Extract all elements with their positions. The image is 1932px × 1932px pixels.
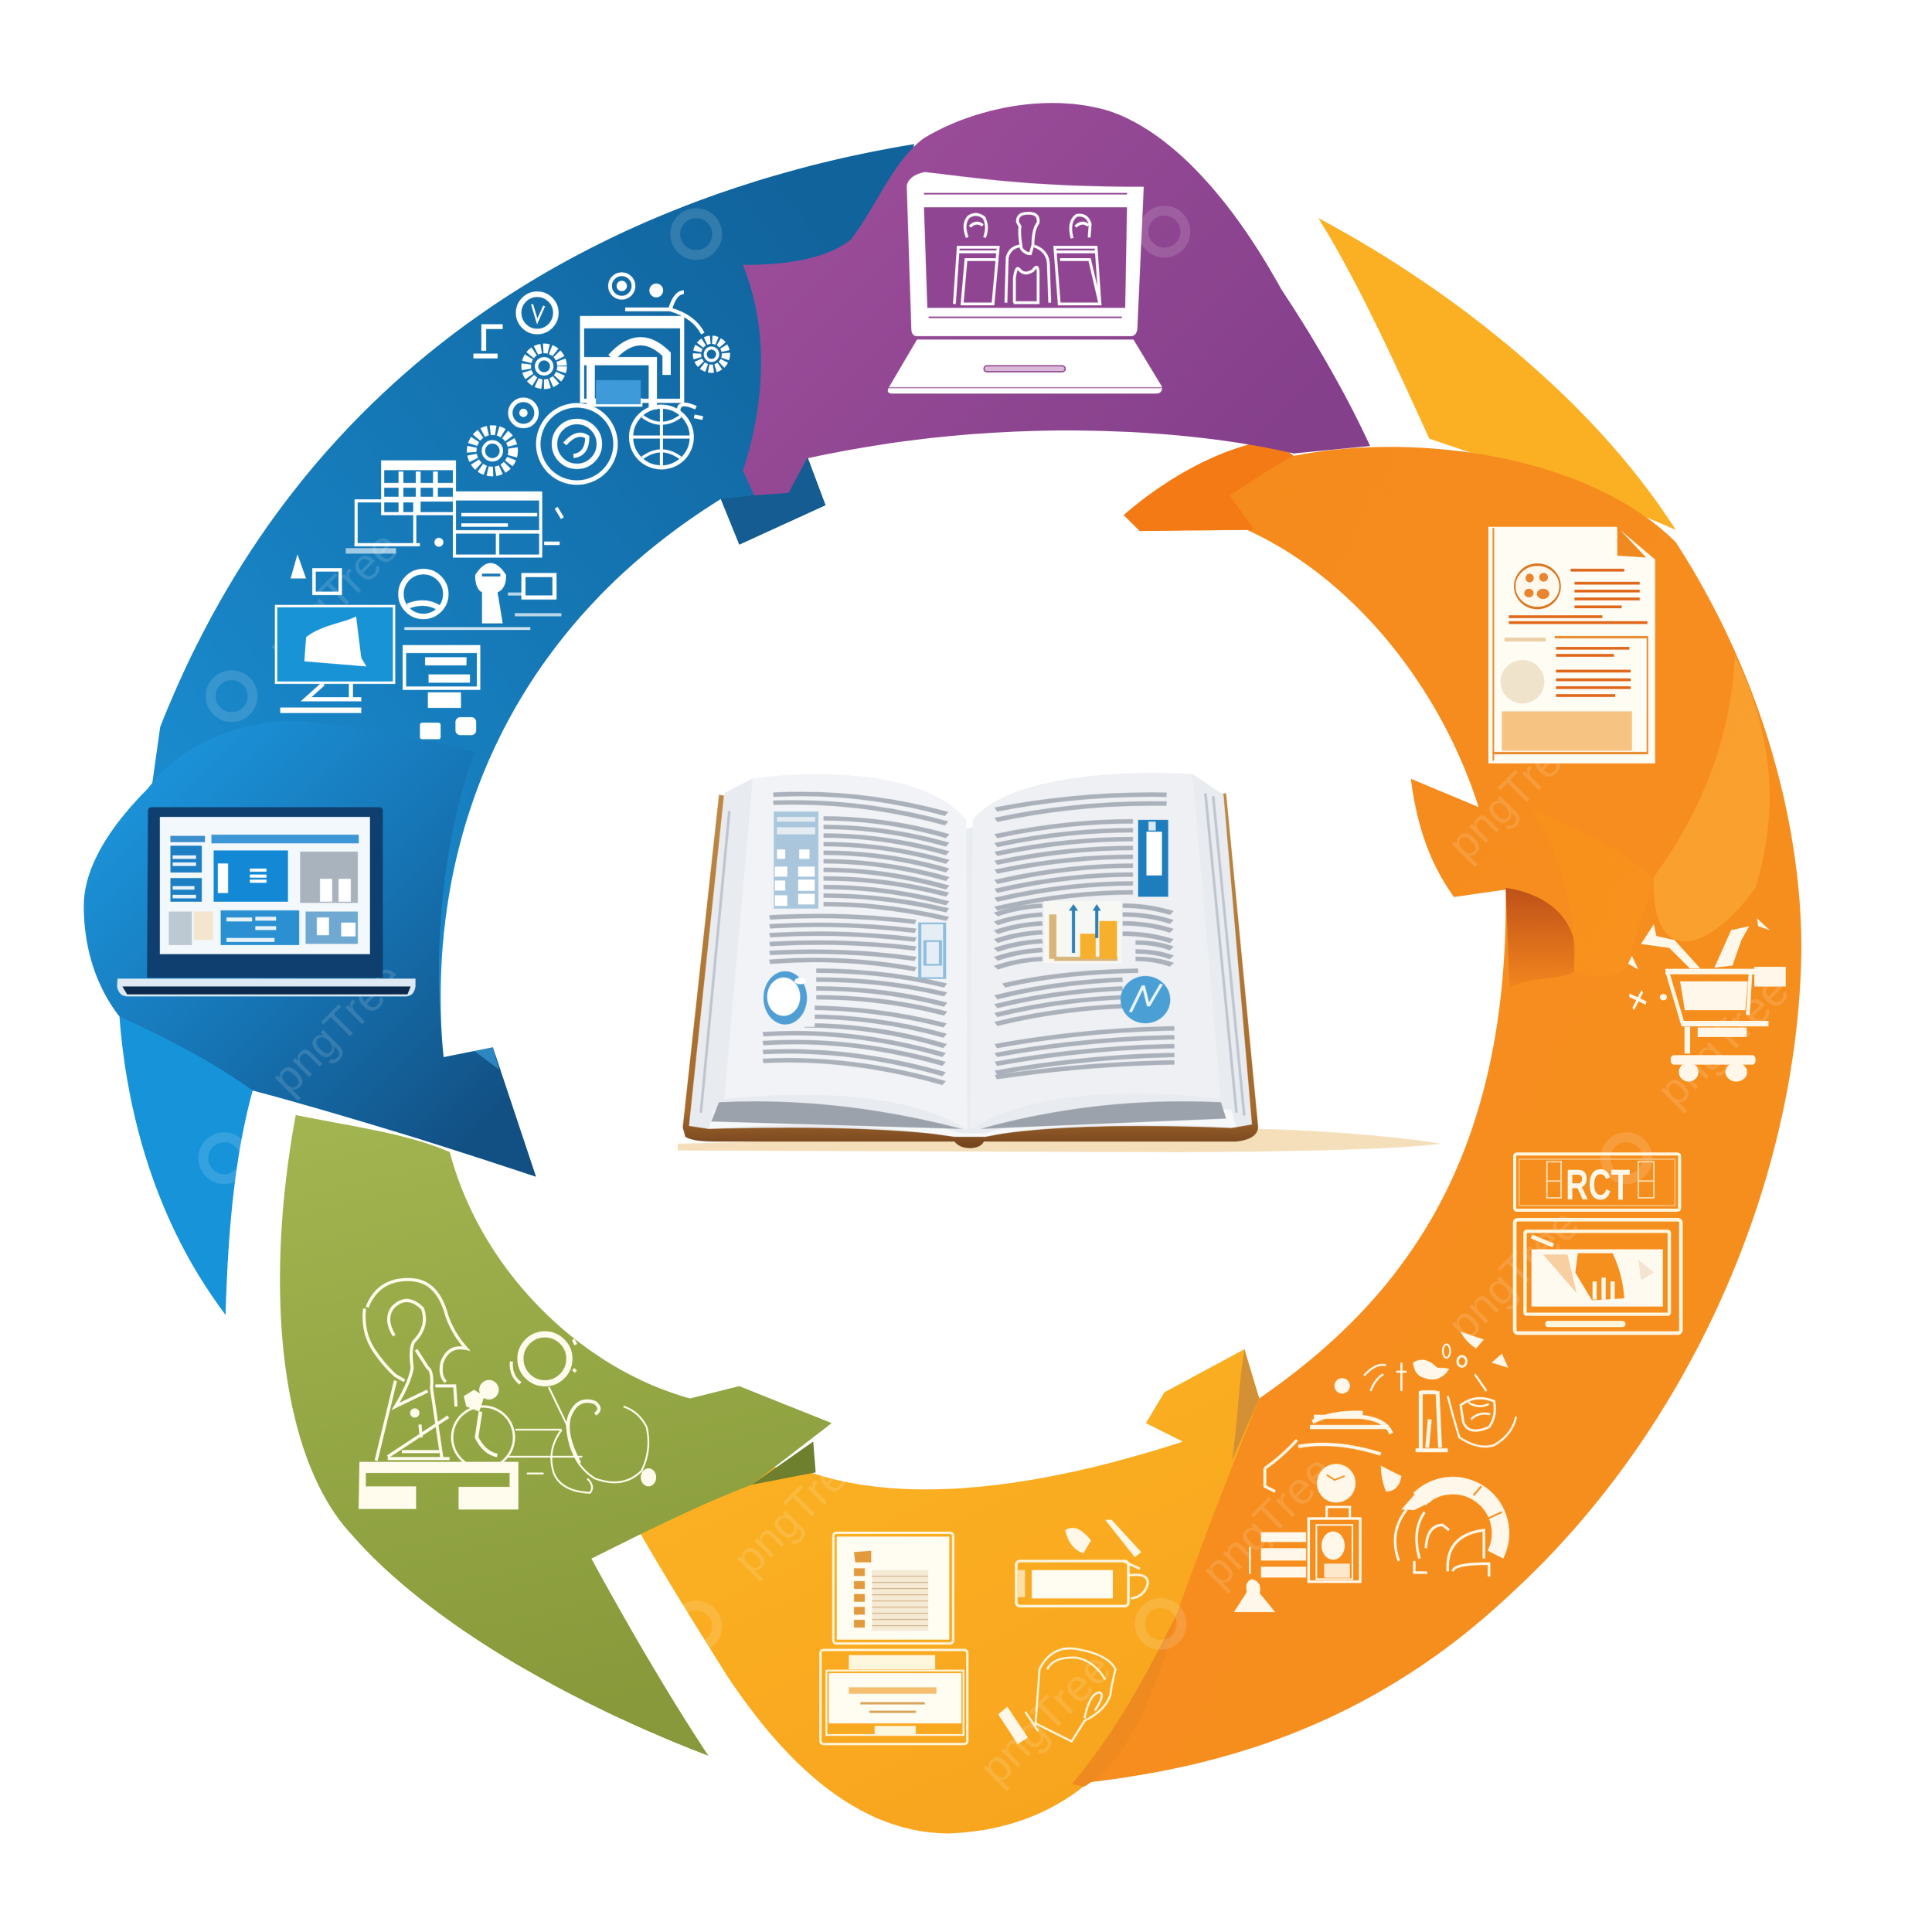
icon: orange lower cluster bbox=[1234, 1332, 1516, 1612]
page stack bbox=[689, 774, 1252, 1136]
icon: open book bbox=[678, 773, 1440, 1152]
icon: yellow document, laptop, and tools bbox=[821, 1520, 1148, 1744]
left page magnifier figure bbox=[760, 968, 815, 1027]
right page blue bookmark figure bbox=[1138, 820, 1168, 896]
watermarks: pngTree bbox=[262, 953, 412, 1104]
right page bbox=[970, 773, 1221, 1131]
watermarks: pngTree bbox=[1438, 1199, 1589, 1350]
icon: middle windows bbox=[345, 462, 563, 556]
left page calculator figure bbox=[772, 811, 821, 910]
blue lobe bbox=[83, 721, 536, 1177]
watermarks: pngTree bbox=[970, 1643, 1121, 1794]
green dark fold bbox=[752, 1441, 815, 1485]
icon: lower small devices bbox=[291, 554, 561, 740]
left page bbox=[724, 774, 968, 1131]
watermarks: pngTree bbox=[724, 1434, 874, 1584]
right page text lines bbox=[996, 794, 1175, 1077]
segment: purple arrow bbox=[743, 103, 1370, 495]
people on screen bbox=[954, 213, 1100, 304]
right page blue circle figure bbox=[1121, 976, 1170, 1023]
group: orange fold shadow under hook bbox=[1505, 810, 1654, 988]
icon: top gears and windows bbox=[471, 274, 726, 482]
icon: purple laptop with three people bbox=[888, 172, 1162, 393]
left page text lines bbox=[763, 794, 947, 1083]
segment: blue arrow bbox=[83, 145, 914, 1315]
right page bar chart bbox=[1044, 901, 1121, 963]
watermarks: pngTree bbox=[258, 522, 409, 672]
watermarks: pngTree bbox=[1438, 719, 1589, 869]
blue lower tail bbox=[120, 1016, 253, 1315]
icon: blue laptop bbox=[117, 807, 416, 996]
instrument base bbox=[359, 1462, 519, 1509]
icon: green instrument sketch bbox=[359, 1280, 656, 1509]
watermarks bbox=[203, 211, 1798, 1794]
arrow tip: dark orange bbox=[1124, 440, 1294, 531]
person bbox=[1413, 1360, 1449, 1379]
blue tip highlight bbox=[444, 1047, 499, 1070]
RCT label: RCT bbox=[1566, 1160, 1630, 1209]
icon: shopping cart bbox=[1628, 918, 1786, 1082]
segment: green arrow bbox=[280, 1115, 832, 1756]
segment: orange arrow bbox=[1072, 440, 1801, 1784]
segment: yellow tail of orange arrow bbox=[1318, 218, 1675, 530]
book shadow bbox=[678, 1129, 1440, 1152]
orange fold highlight bbox=[1654, 655, 1770, 941]
watermarks: pngTree bbox=[1648, 965, 1798, 1116]
segment: yellow arrow bbox=[641, 1349, 1259, 1833]
icon: orange document bbox=[1488, 527, 1655, 764]
icon: desktop monitor bbox=[276, 606, 394, 710]
icon: RCT panel bbox=[1515, 1154, 1681, 1333]
watermarks: pngTree bbox=[1192, 1446, 1342, 1597]
yellow fold shading bbox=[1072, 1614, 1177, 1787]
group: blue process icons bbox=[276, 274, 726, 740]
blue dark tip near purple bbox=[721, 456, 825, 545]
left page small tablet figure bbox=[920, 923, 944, 978]
book cover bbox=[682, 793, 1258, 1148]
